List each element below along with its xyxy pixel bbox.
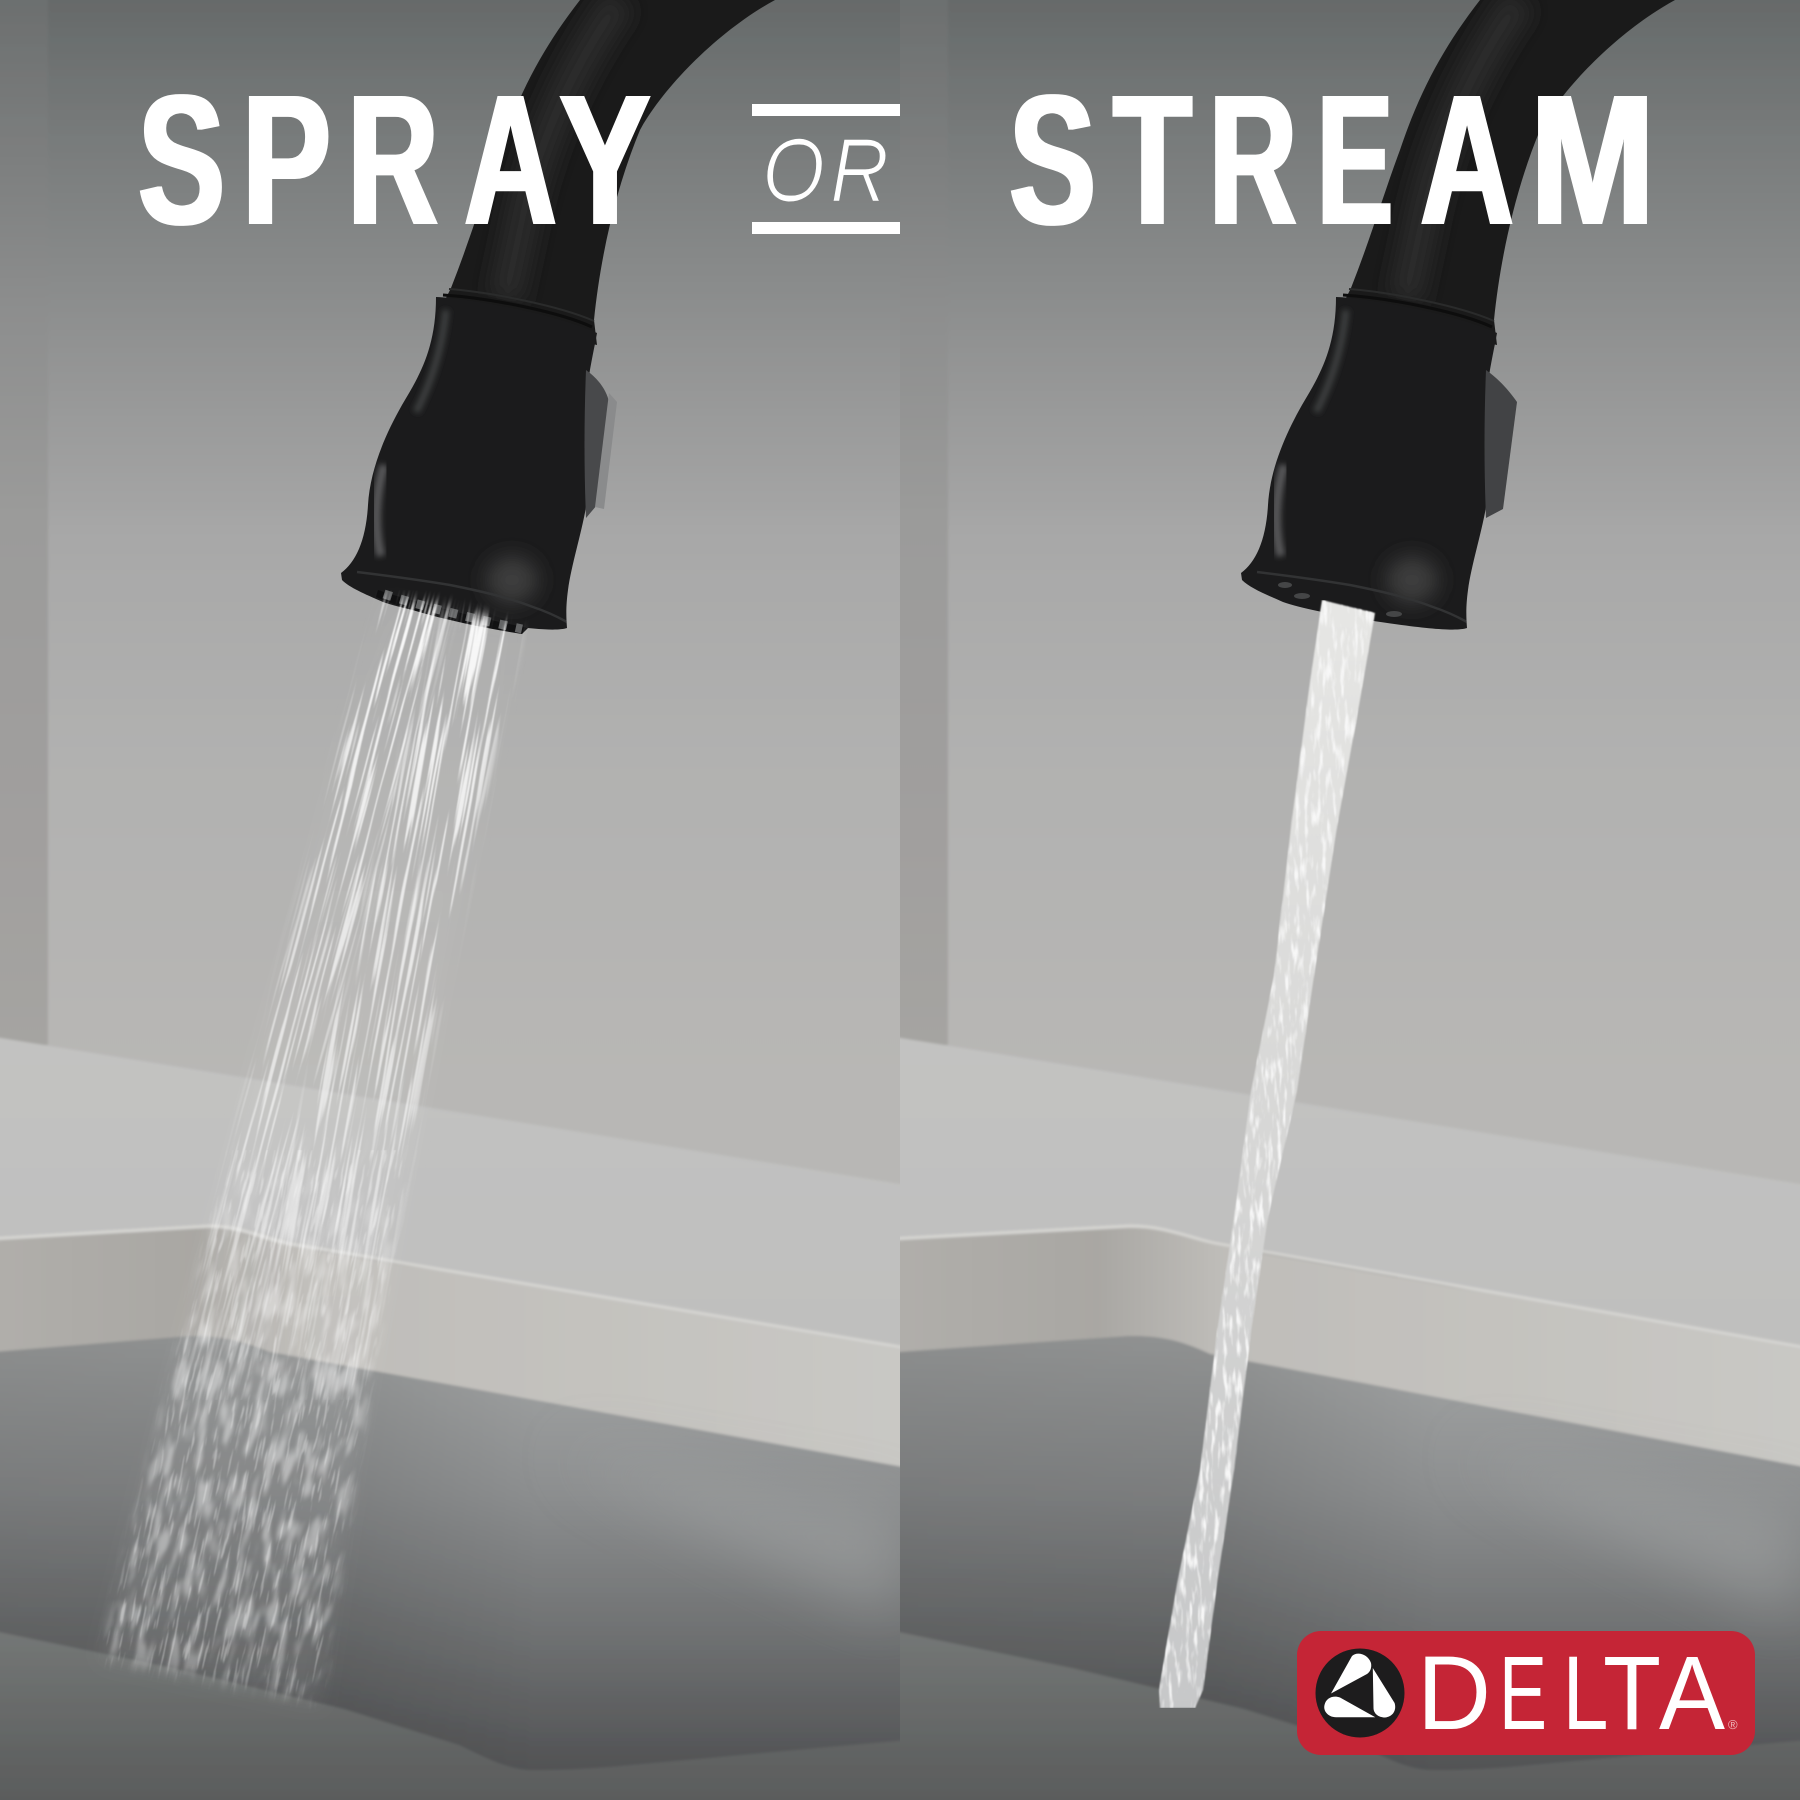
title: stream: S: [1009, 57, 1096, 264]
wall column left: [900, 453, 948, 1045]
title: spray: R: [348, 57, 438, 264]
basin highlight: [694, 1496, 900, 1612]
edge highlight: [870, 1226, 1800, 1352]
background scene: [870, 0, 1800, 1800]
title: stream: T: [1113, 57, 1192, 264]
faucet: [341, 0, 775, 630]
nozzle holes: [1278, 582, 1402, 617]
title: spray: A: [464, 57, 557, 264]
faucet trigger: [1484, 370, 1517, 518]
icon: delta droplets circle: [1316, 1648, 1404, 1738]
delta wordmark: L: [1562, 1635, 1608, 1752]
edge highlight: [0, 1226, 930, 1352]
countertop surface: [0, 1033, 930, 1360]
registered mark: ®: [1728, 1717, 1738, 1732]
title: or with rules: [752, 104, 900, 234]
title: or with rules: O: [762, 121, 825, 221]
sink front rim: [0, 1626, 930, 1800]
spray haze: [110, 1362, 346, 1698]
faucet trigger: [584, 370, 617, 518]
sink basin: [0, 1336, 930, 1800]
panel: stream: [870, 0, 1800, 1800]
panel: spray: [0, 0, 930, 1800]
title: stream: R: [1209, 57, 1297, 264]
sink basin: [870, 1336, 1800, 1800]
spray: soft droplets: [104, 1206, 391, 1700]
title: spray: P: [242, 57, 331, 264]
nozzle spray grid: [376, 590, 528, 634]
title: stream: A: [1420, 57, 1514, 264]
wall column left: [0, 453, 48, 1045]
stream of water: [1159, 600, 1375, 1708]
basin shade: [0, 1336, 446, 1727]
wall background: [870, 0, 1800, 1250]
spray: long streaks left: [182, 590, 460, 1400]
spray: long streaks right: [262, 600, 527, 1400]
basin highlight: [1460, 1450, 1800, 1620]
spray: sparkle streaks: [106, 1150, 402, 1700]
countertop surface: [870, 1033, 1800, 1360]
sink front rim: [870, 1626, 1800, 1800]
faucet: [1241, 0, 1675, 630]
delta wordmark: D: [1417, 1635, 1491, 1752]
title: spray: S: [138, 57, 225, 264]
basin shade: [870, 1336, 1800, 1800]
delta wordmark: E: [1499, 1635, 1547, 1752]
background scene: [0, 0, 930, 1800]
countertop front edge: [0, 1228, 930, 1472]
title: spray: Y: [559, 57, 651, 264]
countertop front edge: [870, 1228, 1800, 1472]
delta wordmark: T: [1603, 1635, 1661, 1752]
delta logo badge: [1297, 1631, 1755, 1755]
delta wordmark: A: [1659, 1635, 1725, 1752]
title: stream: M: [1530, 57, 1655, 264]
title: stream: E: [1317, 57, 1393, 264]
wall background: [0, 0, 930, 1250]
title: or with rules: R: [830, 121, 889, 221]
